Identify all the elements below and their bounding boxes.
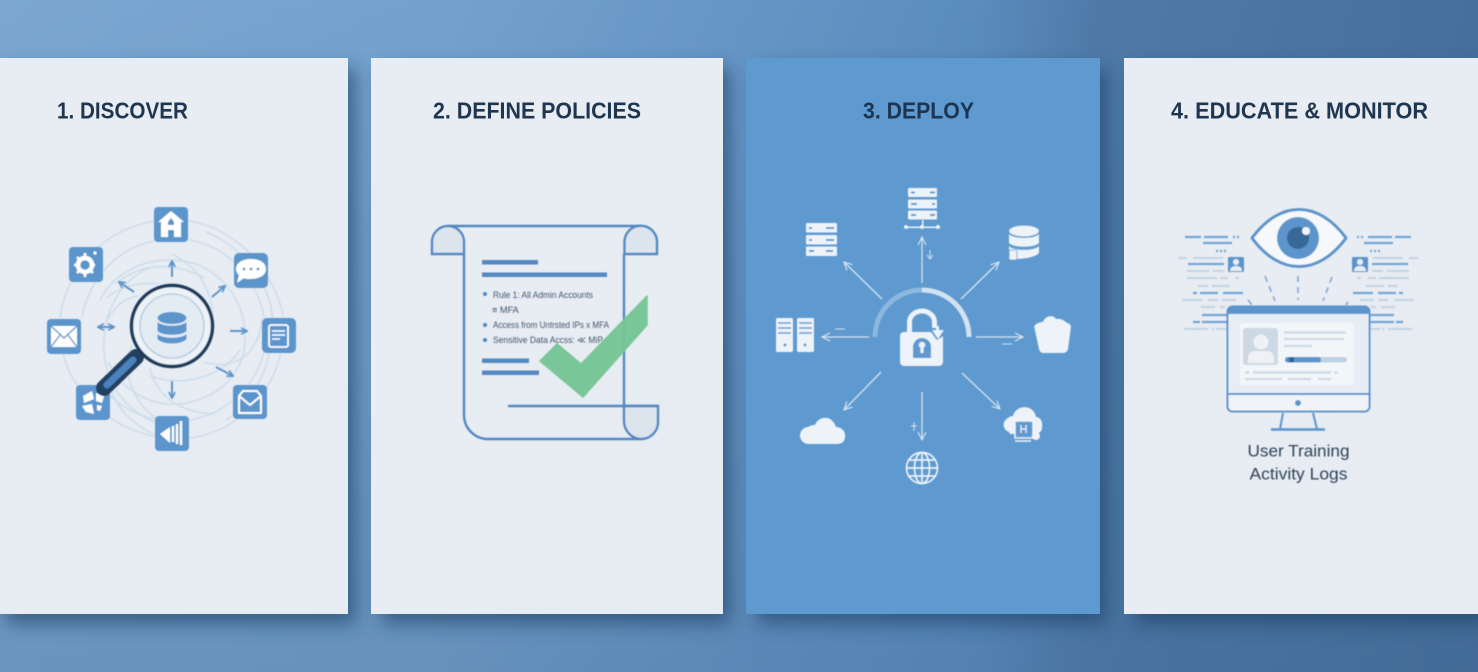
scroll outline xyxy=(432,226,658,439)
monitor caption: User Training xyxy=(1248,442,1350,460)
icon: speaker xyxy=(155,416,189,451)
icon: cloud xyxy=(800,418,845,444)
icon: gear xyxy=(69,247,103,282)
icon: server rack xyxy=(806,223,837,256)
monitor xyxy=(1227,306,1370,430)
monitor caption xyxy=(1248,442,1350,484)
arrows xyxy=(98,261,247,398)
policy scroll xyxy=(432,226,658,439)
panel: define policies xyxy=(371,58,723,614)
rule text: Rule 1: All Admin Accounts xyxy=(493,290,593,300)
icon: globe xyxy=(906,452,938,484)
icon: eye xyxy=(1252,210,1346,266)
heading: 3. deploy: 3. DEPLOY xyxy=(863,98,974,124)
icon: storage bucket xyxy=(1034,316,1071,353)
arrows xyxy=(822,237,1023,440)
monitoring illustration xyxy=(1178,210,1418,484)
icon: twin racks xyxy=(776,318,814,352)
activity log lines, left xyxy=(1178,237,1243,329)
sight lines xyxy=(1248,276,1348,305)
icon: database xyxy=(1009,226,1039,260)
icon: cloud device xyxy=(1004,407,1042,441)
icon: open mail xyxy=(233,385,267,419)
icon: chat xyxy=(234,253,268,288)
swirl background xyxy=(60,220,283,439)
rule text: Sensitive Data Accss: ≪ MiP xyxy=(493,335,603,345)
heading: 2. define policies: 2. DEFINE POLICIES xyxy=(433,98,641,124)
rule bullets xyxy=(483,292,487,342)
rule text: Access from Untrsted IPs x MFA xyxy=(493,320,610,330)
profile card xyxy=(1240,323,1354,385)
icon: padlock xyxy=(900,311,944,366)
rule text xyxy=(492,290,610,345)
activity log lines, right xyxy=(1353,237,1418,329)
icon: database xyxy=(158,312,186,344)
icon: home xyxy=(154,207,188,242)
green check mark xyxy=(540,296,647,397)
deployment hub illustration xyxy=(776,188,1071,484)
magnifying glass xyxy=(104,286,212,388)
scroll heading lines xyxy=(482,260,607,375)
protective arc xyxy=(875,290,969,337)
heading: 1. discover: 1. DISCOVER xyxy=(57,98,188,124)
icon: document xyxy=(262,318,296,353)
heading: 4. educate and monitor: 4. EDUCATE & MONITOR xyxy=(1171,98,1428,124)
panel: deploy xyxy=(746,58,1100,614)
rule text: ≡ MFA xyxy=(492,305,520,315)
icon: networked server xyxy=(904,188,940,229)
icon: globe tile xyxy=(76,385,110,420)
icon: envelope xyxy=(47,319,81,354)
panel: discover xyxy=(0,58,348,614)
monitor caption: Activity Logs xyxy=(1250,464,1348,484)
icon: user badge left xyxy=(1228,257,1244,272)
discovery illustration xyxy=(47,207,296,451)
icon: user badge right xyxy=(1352,257,1368,272)
panel: educate and monitor xyxy=(1124,58,1478,614)
